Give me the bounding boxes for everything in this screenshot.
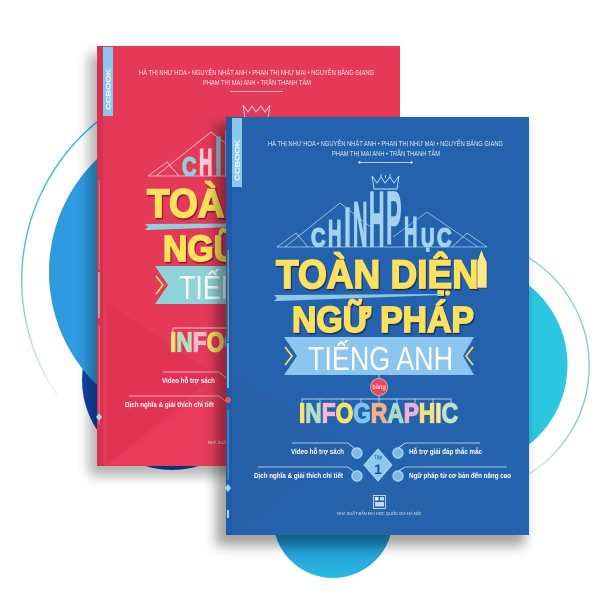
red title: chinh phuc: H bbox=[275, 138, 288, 186]
red title: ngu phap: NGỮ PHÁP bbox=[163, 227, 345, 269]
book: red cover bbox=[96, 46, 400, 466]
authors: HÀ THỊ NHƯ HOA • NGUYỄN NHẬT ANH • PHAN THỊ NHƯ MAI • NGUYỄN BĂNG GIANG bbox=[268, 139, 503, 148]
title: chinh phuc bbox=[311, 174, 452, 264]
mountains line art bbox=[277, 203, 487, 247]
title: toan dien: TOÀN DIỆN bbox=[276, 251, 479, 297]
authors bbox=[268, 139, 503, 158]
red title: chinh phuc: H bbox=[199, 142, 212, 184]
title: chinh phuc: I bbox=[344, 196, 351, 258]
title: chinh phuc: P bbox=[386, 176, 402, 260]
badge: bang: bằng bbox=[372, 384, 386, 391]
blue spine: CCBOOK bbox=[234, 139, 242, 181]
blue spine bbox=[225, 117, 242, 535]
red spine: CCBOOK bbox=[106, 68, 112, 110]
book: blue cover bbox=[225, 117, 529, 535]
ring: right decorative arc bbox=[529, 258, 589, 474]
title: ngu phap: NGỮ PHÁP bbox=[293, 300, 475, 342]
red title: toan dien: TOÀN DIỆN bbox=[148, 182, 351, 228]
ring: left decorative arc bbox=[22, 122, 97, 395]
feature list: Dịch nghĩa & giải thích chi tiết bbox=[254, 471, 343, 480]
red feature list: Video hỗ trợ sách bbox=[162, 376, 215, 385]
red feature list: Dịch nghĩa & giải thích chi tiết bbox=[125, 400, 214, 409]
shadow: red book bbox=[89, 54, 379, 476]
badge: bang bbox=[370, 378, 388, 396]
red banner: TIẾNG ANH bbox=[179, 269, 324, 307]
circle: light blue backdrop bbox=[49, 115, 363, 429]
red infographic heading: INFOGRAPHIC bbox=[170, 326, 329, 358]
icon: crown bbox=[372, 174, 399, 189]
red title: ngu phap: NGỮ PHÁP bbox=[164, 228, 346, 270]
circle: right teal backdrop bbox=[364, 264, 568, 466]
badge: volume 1: Tập bbox=[374, 455, 383, 461]
red title: chinh phuc: C bbox=[182, 152, 197, 182]
title: chinh phuc: H bbox=[404, 208, 418, 256]
icon: publisher logo bbox=[374, 496, 386, 508]
red title: chinh phuc: I bbox=[215, 124, 222, 188]
red feature list bbox=[125, 372, 226, 409]
title: toan dien: TOÀN DIỆN bbox=[277, 252, 480, 298]
divider with dots bbox=[358, 161, 413, 164]
red divider bbox=[230, 90, 283, 92]
title: chinh phuc: C bbox=[437, 222, 452, 252]
shadow: blue book bbox=[216, 124, 525, 546]
red title: chinh phuc: P bbox=[257, 104, 272, 188]
publisher: NHÀ XUẤT BẢN ĐẠI HỌC QUỐC GIA HÀ NỘI bbox=[337, 511, 421, 516]
title: chinh phuc: N bbox=[353, 188, 368, 260]
title: chinh phuc: H bbox=[328, 214, 342, 256]
ribbon bbox=[274, 290, 450, 301]
red title: chinh phuc: H bbox=[240, 104, 256, 192]
badge: volume 1 bbox=[364, 449, 392, 481]
title: ngu phap: NGỮ PHÁP bbox=[292, 298, 474, 340]
red title: chinh phuc: Ụ bbox=[292, 152, 306, 182]
connector tree bbox=[302, 375, 451, 405]
red authors bbox=[139, 68, 374, 87]
title: chinh phuc: C bbox=[311, 222, 326, 252]
circle: dark blue backdrop bbox=[82, 290, 262, 470]
circle: bottom teal backdrop bbox=[273, 458, 393, 578]
badge: volume 1: 1 bbox=[374, 461, 382, 477]
red title: chinh phuc: C bbox=[308, 152, 323, 182]
title: chinh phuc: H bbox=[369, 174, 384, 264]
red mountains bbox=[148, 132, 358, 176]
red title: toan dien: TOÀN DIỆN bbox=[147, 180, 350, 226]
title: chinh phuc: Ụ bbox=[421, 222, 434, 252]
red title: chinh phuc bbox=[182, 104, 323, 192]
banner: tieng anh: TIẾNG ANH bbox=[308, 340, 453, 378]
red crown bbox=[243, 105, 270, 118]
red spine bbox=[96, 46, 113, 466]
red authors: HÀ THỊ NHƯ HOA • NGUYỄN NHẬT ANH • PHAN THỊ NHƯ MAI • NGUYỄN BĂNG GIANG bbox=[139, 68, 374, 77]
infographic heading: INFOGRAPHIC bbox=[299, 398, 458, 428]
red ribbon bbox=[145, 223, 313, 230]
red title: chinh phuc: N bbox=[224, 118, 238, 190]
red publisher: NHÀ XUẤT BẢN ĐẠI HỌC QUỐC GIA HÀ NỘI bbox=[208, 440, 292, 445]
feature list: Video hỗ trợ sách bbox=[291, 447, 344, 456]
feature list: Ngữ pháp từ cơ bản đến nâng cao bbox=[409, 471, 511, 480]
icon: clock tower bbox=[477, 249, 487, 288]
authors: PHẠM THỊ MAI ANH • TRẦN THANH TÂM bbox=[332, 148, 440, 158]
feature list: Hỗ trợ giải đáp thắc mắc bbox=[409, 447, 482, 456]
red authors: PHẠM THỊ MAI ANH • TRẦN THANH TÂM bbox=[203, 77, 311, 87]
feature list bbox=[254, 443, 511, 481]
